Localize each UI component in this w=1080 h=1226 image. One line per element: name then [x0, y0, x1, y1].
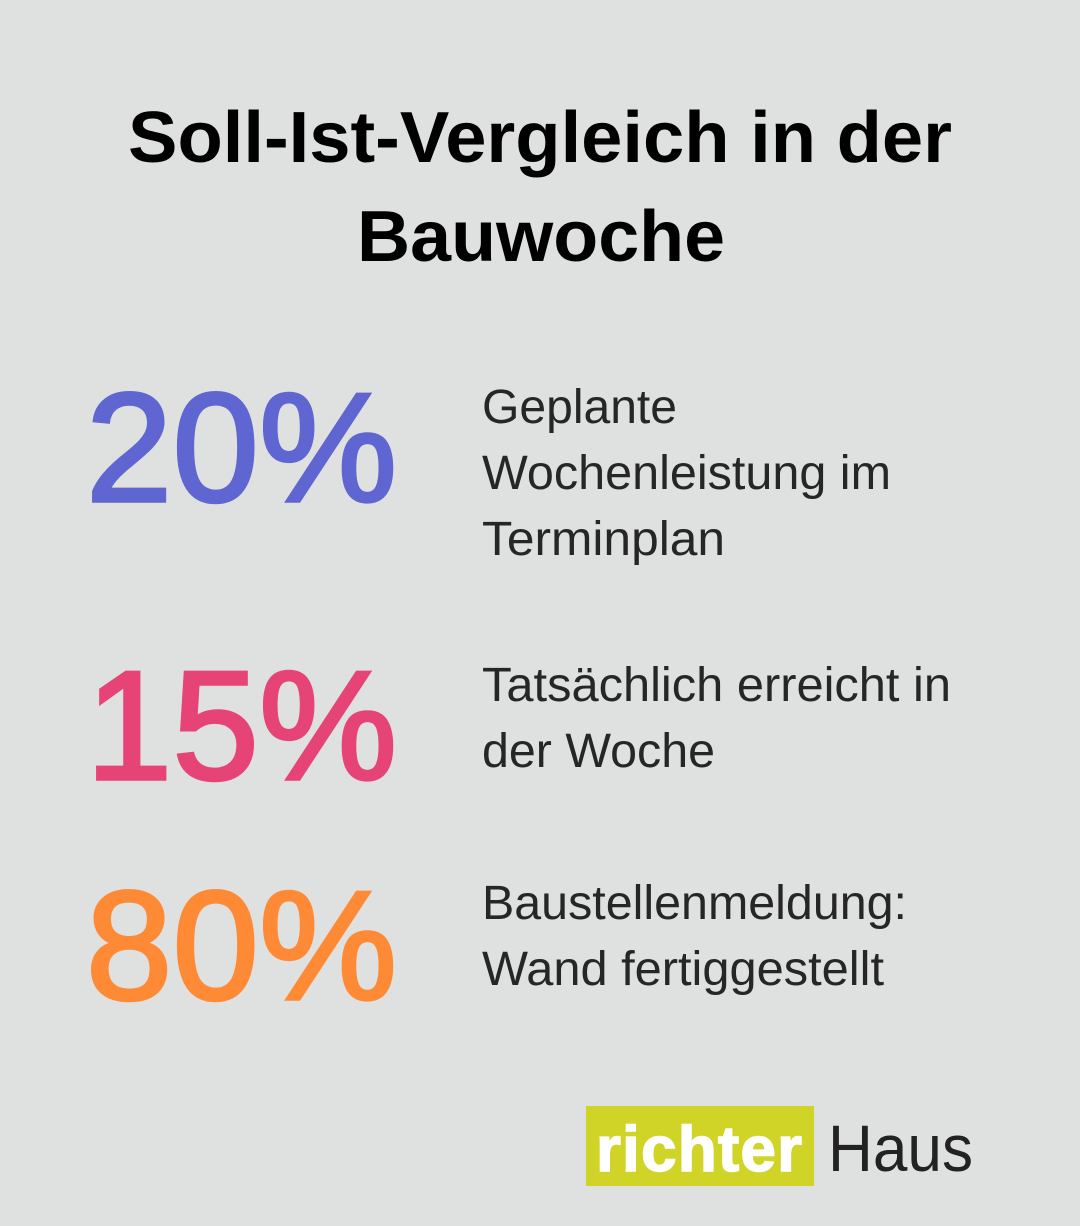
description: planned weekly output: Geplante — [482, 381, 677, 434]
stat: 15%: 15% — [86, 639, 397, 812]
description: site report — [482, 877, 907, 996]
logo: richter Haus: richter — [596, 1113, 802, 1185]
description: site report: Wand fertiggestellt — [482, 943, 884, 996]
logo: richter Haus: Haus — [828, 1111, 973, 1185]
logo: richter Haus — [586, 1106, 973, 1186]
description: actually reached: Tatsächlich erreicht in — [482, 659, 951, 712]
title: Bauwoche — [357, 197, 725, 277]
stat: 20% — [86, 361, 891, 566]
stat: 15% — [86, 639, 951, 812]
description: planned weekly output: Wochenleistung im — [482, 447, 891, 500]
description: planned weekly output — [482, 381, 891, 566]
title: Soll-Ist-Vergleich in der — [128, 98, 952, 178]
stat: 80% — [86, 859, 907, 1032]
description: actually reached — [482, 659, 951, 778]
description: actually reached: der Woche — [482, 725, 715, 778]
description: site report: Baustellenmeldung: — [482, 877, 907, 930]
title — [128, 98, 952, 277]
stat: 20%: 20% — [86, 361, 397, 534]
stat: 80%: 80% — [86, 859, 397, 1032]
description: planned weekly output: Terminplan — [482, 513, 725, 566]
